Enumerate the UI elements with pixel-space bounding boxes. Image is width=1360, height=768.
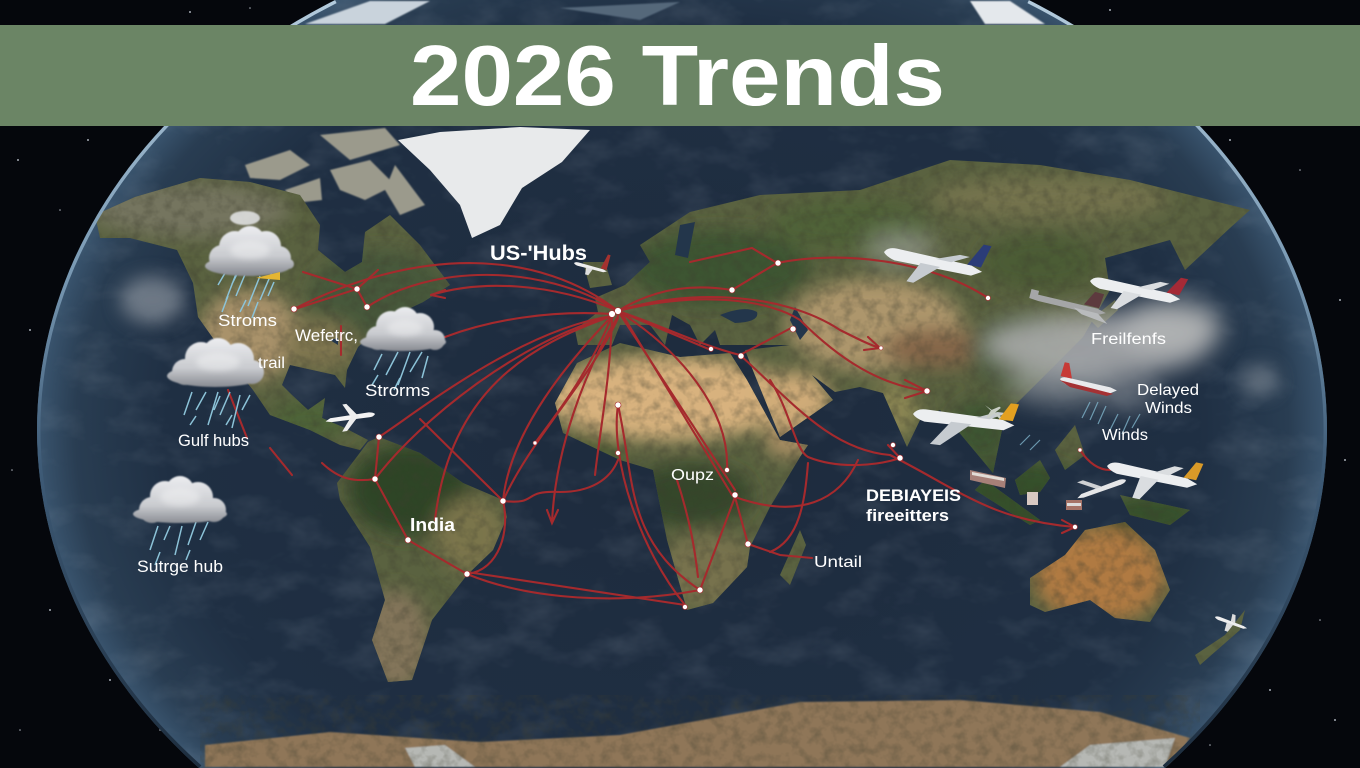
label: delayed winds: Winds — [1145, 400, 1192, 417]
Canadian arctic islands — [244, 127, 426, 216]
hub markers — [291, 260, 1082, 610]
continents with blended colours — [96, 160, 1250, 682]
label: storms Atlantic: Strorms — [365, 382, 430, 400]
rain near Philippines — [1020, 402, 1140, 450]
cargo ships — [970, 470, 1082, 510]
plane: blue tail — [879, 225, 992, 297]
inland seas — [330, 222, 808, 345]
storm cloud: South Pacific — [133, 476, 227, 565]
land grain — [102, 161, 1248, 682]
storm cloud: Pacific northwest — [205, 211, 294, 318]
label: US hubs: US-'Hubs — [490, 241, 587, 265]
South America and Atlantic routes — [228, 316, 700, 605]
plane: Caribbean — [324, 400, 377, 434]
label: Oups: Oupz — [671, 467, 714, 484]
plane: New Zealand — [1212, 609, 1250, 638]
label: delayed winds — [1137, 382, 1199, 417]
plane: orange tail — [1102, 444, 1203, 511]
label: delayed winds: Delayed — [1137, 382, 1199, 399]
plane: yellow tail — [910, 392, 1019, 454]
label: delayed freighters: DEBIAYEIS — [866, 487, 961, 505]
label: gulf hubs: Gulf hubs — [178, 432, 249, 450]
label: Weferic: Wefetrc, — [295, 327, 358, 345]
label: trail: trail — [258, 355, 285, 372]
storm cloud: Mexico — [167, 338, 264, 428]
label: freighters: Freilfenfs — [1091, 331, 1166, 348]
Africa routes — [535, 311, 812, 605]
storm cloud: Atlantic — [360, 307, 446, 390]
plane: grey freighter — [1028, 277, 1114, 324]
plane: small white over Indonesia — [1072, 466, 1127, 500]
route lines — [228, 248, 1110, 605]
title band — [0, 25, 1360, 126]
plane: near US hubs — [572, 247, 611, 280]
label: delayed freighters: fireeitters — [866, 506, 949, 525]
plane: red tail — [1085, 259, 1188, 322]
polar clouds at top of globe — [305, 1, 1045, 24]
soft ocean clouds — [120, 276, 1278, 395]
label: winds: Winds — [1102, 427, 1148, 444]
label: storms northwest: Stroms — [218, 312, 277, 330]
Middle East and Asia routes — [618, 248, 1110, 552]
North America routes — [294, 263, 618, 355]
label: Untail: Untail — [814, 554, 862, 571]
title: 2026 Trends — [410, 29, 945, 124]
Greenland — [398, 127, 590, 238]
plane: red top freighter — [1059, 362, 1120, 398]
label: delayed freighters — [866, 487, 961, 525]
storm cloud wing marker — [256, 272, 280, 280]
label: India: India — [410, 514, 456, 535]
smoke cloud over Asia — [864, 230, 1222, 413]
label: surge hub: Sutrge hub — [137, 558, 223, 576]
Antarctica grain — [200, 695, 1200, 768]
Antarctica — [205, 700, 1190, 767]
plane: small over Vietnam — [980, 399, 1005, 424]
